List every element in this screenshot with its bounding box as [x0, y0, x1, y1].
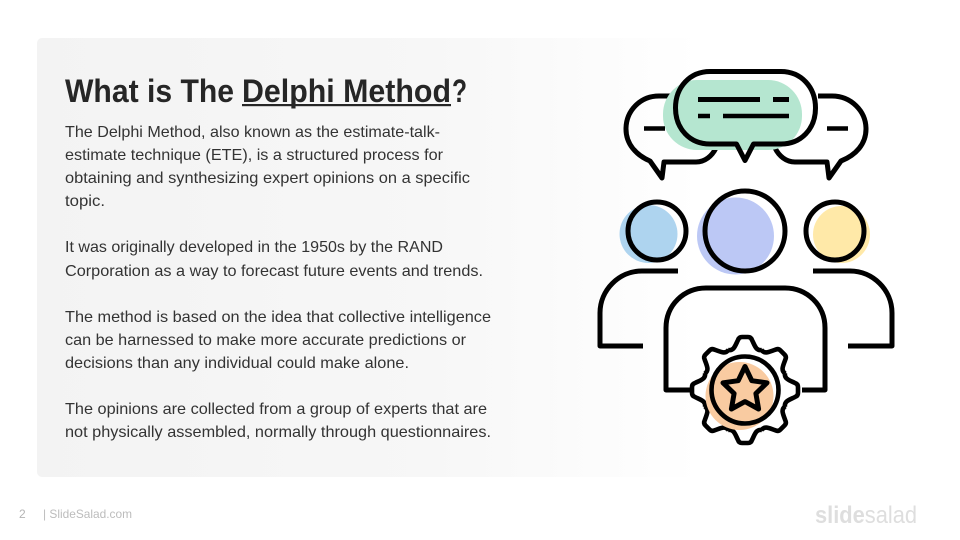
title: What is The: [65, 73, 234, 109]
title: ?: [452, 73, 467, 109]
icon: gear with star: [692, 337, 798, 443]
text block: definition: [65, 124, 470, 210]
text block: collective intelligence: can be harnessed to make more accurate predictions or: [65, 332, 467, 349]
title: Delphi Method: [242, 73, 451, 109]
text block: origin: Corporation as a way to forecast future events and trends.: [65, 263, 483, 280]
text block: definition: topic.: [65, 193, 105, 210]
page number: 2: [19, 507, 26, 521]
logo: slidesalad: slidesalad: [815, 502, 917, 529]
icon: centre person: [666, 191, 825, 390]
text block: definition: estimate technique (ETE), is a structured process for: [65, 147, 444, 164]
text block: definition: obtaining and synthesizing expert opinions on a specific: [65, 170, 470, 187]
text block: questionnaires: [65, 401, 491, 441]
footer site name: | SlideSalad.com: [43, 507, 132, 521]
text block: definition: The Delphi Method, also known as the estimate-talk-: [65, 124, 440, 141]
icon: right person: [806, 202, 892, 346]
text block: collective intelligence: The method is based on the idea that collective intelligence: [65, 309, 491, 326]
icon: experts discussing: [600, 72, 892, 443]
text block: collective intelligence: decisions than any individual could make alone.: [65, 355, 409, 372]
icon: left person: [600, 202, 686, 346]
text block: origin: It was originally developed in the 1950s by the RAND: [65, 239, 443, 256]
text block: collective intelligence: [65, 309, 491, 372]
text block: questionnaires: The opinions are collected from a group of experts that are: [65, 401, 487, 418]
text block: questionnaires: not physically assembled, normally through questionnaires.: [65, 424, 491, 441]
title: [65, 73, 467, 109]
panel: text background: [37, 38, 700, 477]
text block: origin: [65, 239, 483, 280]
icon: speech bubbles: [626, 72, 866, 178]
